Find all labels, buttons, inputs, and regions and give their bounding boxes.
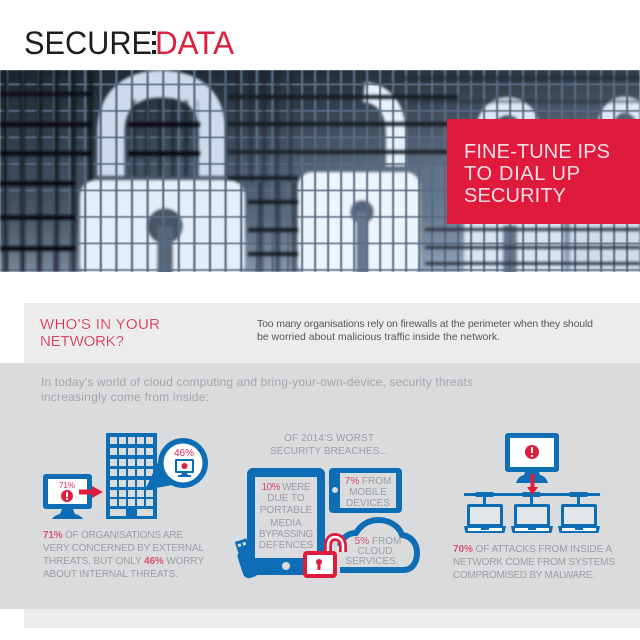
icon: cloud: 5% FROM	[355, 536, 401, 547]
arrow	[79, 486, 103, 498]
icon: large tablet: DEFENCES	[259, 540, 314, 551]
icon: three laptops	[464, 504, 600, 533]
headline box: FINE-TUNE IPS	[464, 141, 610, 163]
logo: SECURE	[24, 25, 152, 61]
lead text	[41, 375, 473, 404]
text: 71% stat: OF ORGANISATIONS ARE	[65, 530, 183, 541]
heading: worst breaches	[270, 433, 388, 457]
icon: large tablet: DUE TO	[267, 493, 305, 504]
lead text: In today's world of cloud computing and bring-your-own-device, security threats	[41, 375, 473, 389]
icon: cloud	[340, 520, 417, 570]
icon: cloud: SERVICES.	[345, 556, 399, 567]
heading: worst breaches: SECURITY BREACHES...	[270, 446, 388, 457]
icon: monitor with external threat: 71%	[59, 481, 75, 490]
lock four	[570, 105, 640, 275]
icon: USB stick	[233, 538, 260, 580]
icon: small tablet	[329, 468, 402, 513]
text: 70% stat	[453, 544, 615, 581]
lock one	[80, 84, 245, 280]
icon: large tablet: BYPASSING	[259, 529, 313, 540]
intro paragraph: be worried about malicious traffic inside the network.	[257, 331, 500, 343]
text: 71% stat line 4: ABOUT INTERNAL THREATS.	[43, 569, 178, 580]
icon: open padlock	[303, 537, 343, 578]
intro paragraph: Too many organisations rely on firewalls at the perimeter when they should	[257, 318, 593, 330]
text: 70% stat: COMPROMISED BY MALWARE.	[453, 570, 595, 581]
heading: WHO'S IN YOUR	[40, 316, 160, 333]
icon: large tablet	[247, 468, 325, 575]
grid	[0, 70, 290, 272]
text: 71% stat: 71%	[43, 530, 63, 541]
text: 70% stat: NETWORK COME FROM SYSTEMS	[453, 557, 615, 568]
icon: large tablet: PORTABLE	[260, 505, 313, 516]
icon: small tablet: MOBILE	[349, 487, 387, 498]
icon: large tablet: 10% WERE	[262, 482, 311, 493]
headline box	[447, 119, 640, 224]
icon: infected monitor on network	[464, 433, 600, 505]
network line	[464, 492, 600, 505]
arrow	[527, 474, 538, 495]
lead text: increasingly come from inside:	[41, 390, 209, 404]
logo	[24, 25, 235, 61]
lock three	[464, 106, 564, 275]
lock two	[298, 92, 420, 277]
icon: large tablet: MEDIA	[270, 518, 302, 529]
logo: DATA	[155, 25, 235, 61]
bottom strip	[24, 609, 640, 628]
icon: small tablet: 7% FROM	[345, 476, 391, 487]
icon: magnified bubble: 46%	[174, 448, 194, 459]
icon: office building	[106, 433, 157, 519]
panel: who's in your network	[24, 303, 640, 363]
intro paragraph	[257, 318, 593, 343]
icon: cloud: CLOUD	[357, 546, 393, 557]
headline box: SECURITY	[464, 185, 566, 207]
heading	[40, 316, 160, 350]
text: 70% stat: 70% OF ATTACKS FROM INSIDE A	[453, 544, 612, 555]
hero photo: padlocks behind a grid	[0, 70, 640, 280]
heading: worst breaches: OF 2014'S WORST	[284, 433, 374, 444]
text: 71% stat line 3: THREATS, BUT ONLY 46% WORRY	[43, 556, 204, 567]
icon: magnified bubble	[145, 438, 208, 490]
icon: monitor with external threat	[43, 474, 103, 519]
heading: NETWORK?	[40, 333, 124, 350]
panel: grey statistics	[0, 363, 640, 609]
icon: small tablet: DEVICES	[346, 498, 390, 509]
text: 71% stat line 2: VERY CONCERNED BY EXTERNAL	[43, 543, 204, 554]
headline box: TO DIAL UP	[464, 163, 580, 185]
